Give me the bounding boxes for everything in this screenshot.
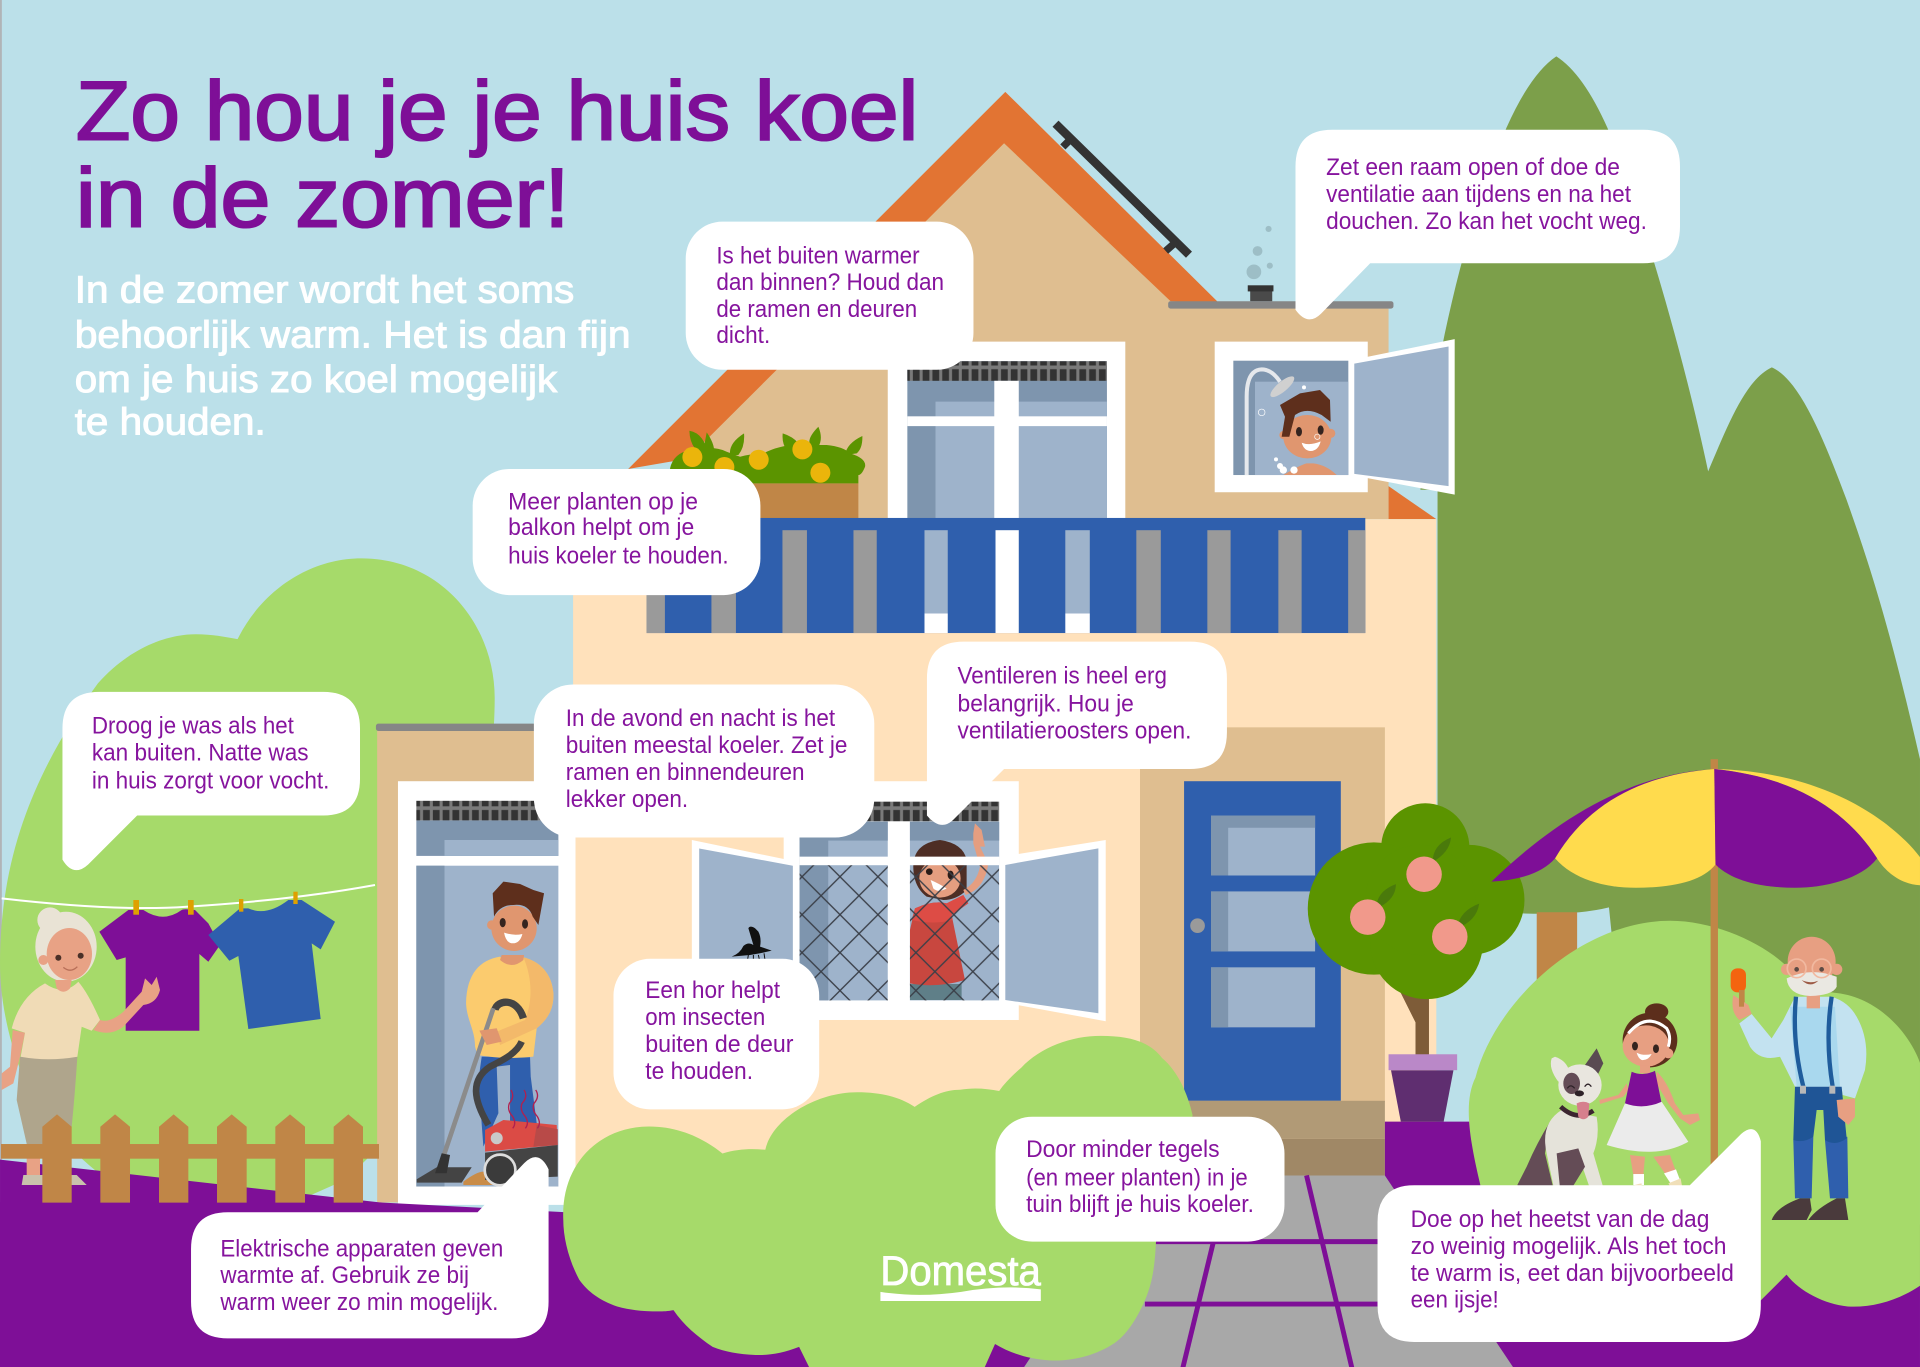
- grandpa with ice lolly: [1731, 937, 1866, 1220]
- balcony railing: [647, 518, 1365, 633]
- main window with insect screen: [692, 781, 1106, 1021]
- callout: avond en nacht: ramen en binnendeuren: [566, 759, 804, 786]
- purple ground: [0, 1122, 1920, 1367]
- callout: heetst van de dag: Doe op het heetst van de dag: [1411, 1206, 1709, 1233]
- door steps: [1187, 1101, 1385, 1177]
- intro text: om je huis zo koel mogelijk: [75, 359, 558, 401]
- door with surround: [1140, 727, 1385, 1102]
- intro text: te houden.: [75, 402, 266, 444]
- callout: was drogen: kan buiten. Natte was: [92, 739, 309, 766]
- callout: douchen: [1296, 130, 1680, 319]
- callout: planten op balkon: huis koeler te houden.: [508, 542, 729, 569]
- centre bush: [563, 1036, 1193, 1367]
- callout: douchen: ventilatie aan tijdens en na het: [1326, 181, 1631, 208]
- callout: elektrische apparaten: warm weer zo min mogelijk.: [219, 1289, 498, 1316]
- callout: elektrische apparaten: [191, 1157, 549, 1338]
- callout: ramen dicht: [686, 222, 973, 370]
- callout: minder tegels: Door minder tegels: [1026, 1136, 1220, 1163]
- wooden fence: [1, 1114, 379, 1203]
- logo: Domesta: Domesta: [880, 1247, 1042, 1294]
- callout: ventileren: ventilatieroosters open.: [958, 717, 1191, 744]
- callout: heetst van de dag: [1378, 1129, 1761, 1342]
- callout: heetst van de dag: te warm is, eet dan bijvoorbeeld: [1411, 1260, 1734, 1287]
- plants on balcony: [670, 427, 865, 519]
- callout: hor: [613, 959, 819, 1109]
- callout: was drogen: in huis zorgt voor vocht.: [92, 768, 329, 795]
- solar panel: [1056, 124, 1189, 255]
- callout: avond en nacht: buiten meestal koeler. Zet je: [566, 732, 847, 759]
- callout: avond en nacht: In de avond en nacht is het: [566, 705, 835, 732]
- callout: ramen dicht: dan binnen? Houd dan: [716, 269, 944, 296]
- callout: ventileren: belangrijk. Hou je: [958, 690, 1134, 717]
- callout: avond en nacht: lekker open.: [566, 786, 688, 813]
- callout: ramen dicht: Is het buiten warmer: [716, 242, 920, 269]
- parasol: [1491, 759, 1920, 1169]
- callout: hor: om insecten: [645, 1004, 765, 1031]
- intro text: [75, 269, 631, 444]
- callout: hor: te houden.: [645, 1058, 753, 1085]
- mosquito: [732, 927, 772, 966]
- tree trunk behind: [1537, 912, 1577, 998]
- left bush: [0, 558, 495, 1224]
- callout: heetst van de dag: een ijsje!: [1411, 1287, 1499, 1314]
- callout: ventileren: [927, 642, 1227, 825]
- callout: minder tegels: (en meer planten) in je: [1026, 1164, 1248, 1191]
- title: Zo hou je je huis koel: [76, 65, 918, 158]
- callout: ramen dicht: de ramen en deuren: [716, 296, 917, 323]
- callout: ventileren: Ventileren is heel erg: [958, 662, 1167, 689]
- callout: hor: buiten de deur: [645, 1031, 793, 1058]
- callout: elektrische apparaten: Elektrische apparaten geven: [220, 1235, 503, 1262]
- callout: minder tegels: [996, 1117, 1284, 1242]
- title: in de zomer!: [76, 152, 569, 245]
- intro text: behoorlijk warm. Het is dan fijn: [75, 315, 631, 357]
- dog: [1517, 1048, 1605, 1195]
- house upper roof: [628, 92, 1436, 519]
- woman waving in window: [910, 823, 988, 1000]
- intro text: In de zomer wordt het soms: [75, 269, 574, 311]
- title: [76, 65, 918, 245]
- grey garden path: [1024, 1175, 1513, 1367]
- balcony window: [888, 342, 1125, 527]
- left annex: [376, 724, 584, 1205]
- lower house wall: [573, 519, 1436, 1224]
- callout: avond en nacht: [534, 684, 874, 838]
- background trees: [1420, 56, 1920, 1102]
- callout: minder tegels: tuin blijft je huis koeler.: [1026, 1191, 1254, 1218]
- girl: [1599, 1003, 1700, 1197]
- callout: was drogen: Droog je was als het: [92, 712, 294, 739]
- potted fruit tree: [1308, 803, 1524, 1122]
- callout: planten op balkon: [473, 469, 760, 595]
- man with vacuum cleaner: [417, 882, 558, 1185]
- callout: douchen: douchen. Zo kan het vocht weg.: [1326, 208, 1647, 235]
- chimney with smoke: [1247, 226, 1273, 301]
- callout: ramen dicht: dicht.: [716, 322, 770, 349]
- callout: heetst van de dag: zo weinig mogelijk. Als het toch: [1411, 1233, 1727, 1260]
- callout: elektrische apparaten: warmte af. Gebruik ze bij: [220, 1262, 469, 1289]
- callout: planten op balkon: Meer planten op je: [508, 488, 698, 515]
- clothesline with t-shirts: [2, 885, 375, 1033]
- callout: was drogen: [62, 692, 360, 870]
- callout: douchen: Zet een raam open of doe de: [1326, 154, 1620, 181]
- callout: planten op balkon: balkon helpt om je: [508, 514, 694, 541]
- callout: hor: Een hor helpt: [645, 977, 780, 1004]
- right bush: [1469, 921, 1920, 1310]
- grandma: [2, 907, 100, 1185]
- small bathroom window with shower: [1215, 339, 1455, 495]
